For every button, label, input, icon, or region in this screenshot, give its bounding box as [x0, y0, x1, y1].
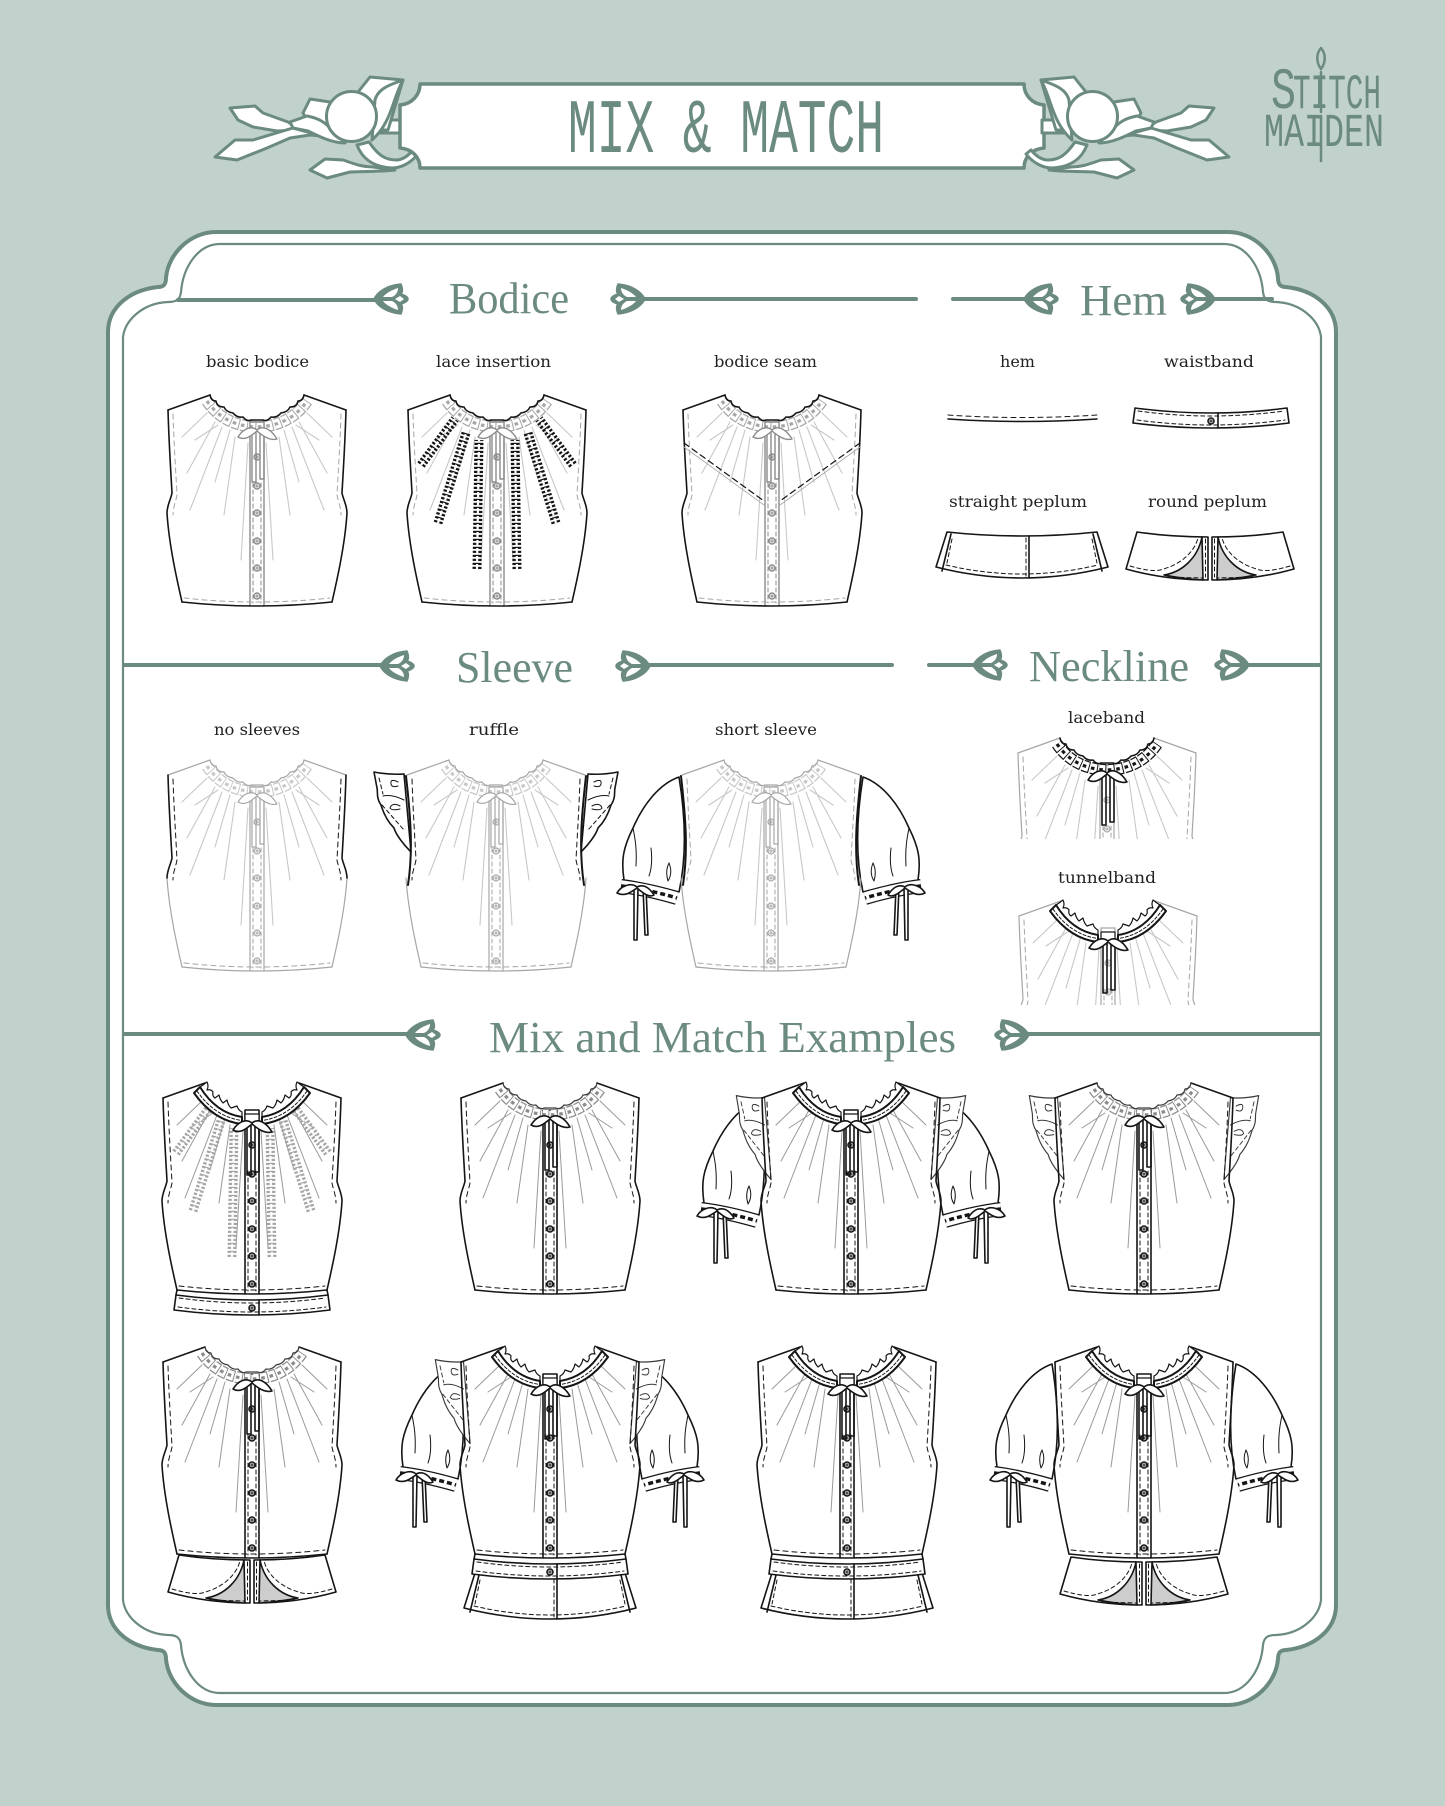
section header: Hem	[953, 276, 1272, 325]
labels: neckline options: laceband	[1068, 709, 1145, 727]
example: tunnelband, waistband, straight peplum	[757, 1346, 937, 1619]
icon: right floral ornament	[1026, 77, 1229, 178]
logo: Stitch Maiden	[1264, 48, 1384, 161]
labels: hem options: straight peplum	[949, 493, 1087, 511]
labels: hem options: hem	[1000, 353, 1035, 371]
labels: bodice options: basic bodice	[206, 353, 309, 371]
garment: tunnelband neckline	[1018, 899, 1198, 1005]
labels: bodice options: lace insertion	[436, 353, 551, 371]
labels: neckline options: tunnelband	[1058, 869, 1156, 887]
labels: hem options	[949, 353, 1267, 511]
logo text	[1264, 61, 1384, 161]
section header: Mix and Match Examples: Mix and Match Examples	[489, 1013, 956, 1062]
labels: bodice options	[206, 353, 817, 371]
section header: Sleeve	[124, 643, 892, 692]
icon: needle	[1317, 48, 1325, 161]
main panel frame	[108, 232, 1336, 1705]
section header: Neckline	[929, 642, 1320, 691]
section header: Hem: Hem	[1080, 276, 1167, 325]
garment part: round peplum	[1126, 532, 1294, 580]
garment: lace insertion	[407, 395, 587, 606]
section header: Neckline: Neckline	[1029, 642, 1189, 691]
logo text: S	[1271, 61, 1296, 126]
section header: Mix and Match Examples	[124, 1013, 1320, 1062]
title banner	[215, 77, 1229, 178]
example: tunnelband, ruffle, sleeve, waistband, straight peplum	[396, 1346, 704, 1619]
garment part: hem	[948, 415, 1097, 422]
garment: basic bodice	[167, 395, 347, 606]
garment part: straight peplum	[936, 532, 1108, 578]
garment: bodice seam	[682, 395, 862, 606]
labels: sleeve options	[214, 721, 817, 739]
example: tunnelband, lace insertion, waistband	[162, 1082, 342, 1315]
garment: laceband neckline	[1017, 737, 1197, 839]
garment part: waistband	[1133, 408, 1289, 428]
garment: short sleeve	[617, 760, 925, 971]
garment: ruffle	[374, 760, 618, 971]
example: laceband, ruffle	[1029, 1083, 1259, 1294]
section header: Sleeve: Sleeve	[456, 643, 573, 692]
logo text: MAIDEN	[1264, 108, 1384, 161]
labels: sleeve options: ruffle	[469, 721, 519, 739]
example: laceband, round peplum	[162, 1347, 342, 1603]
title plate	[400, 84, 1044, 168]
labels: hem options: round peplum	[1148, 493, 1267, 511]
title text: MIX & MATCH	[568, 89, 884, 176]
labels: hem options: waistband	[1164, 353, 1254, 371]
labels: neckline options	[1058, 709, 1156, 887]
labels: sleeve options: short sleeve	[715, 721, 817, 739]
garment: no sleeves	[167, 760, 347, 971]
icon: left floral ornament	[215, 77, 418, 178]
example: tunnelband, short sleeve, round peplum	[990, 1346, 1298, 1605]
labels: bodice options: bodice seam	[714, 353, 817, 371]
section header: Bodice	[178, 274, 916, 323]
logo text: TITCH	[1293, 67, 1381, 123]
example: tunnelband, ruffle, short sleeve	[697, 1082, 1005, 1294]
section header: Bodice: Bodice	[449, 274, 569, 323]
labels: sleeve options: no sleeves	[214, 721, 300, 739]
example: laceband, basic	[460, 1083, 640, 1294]
